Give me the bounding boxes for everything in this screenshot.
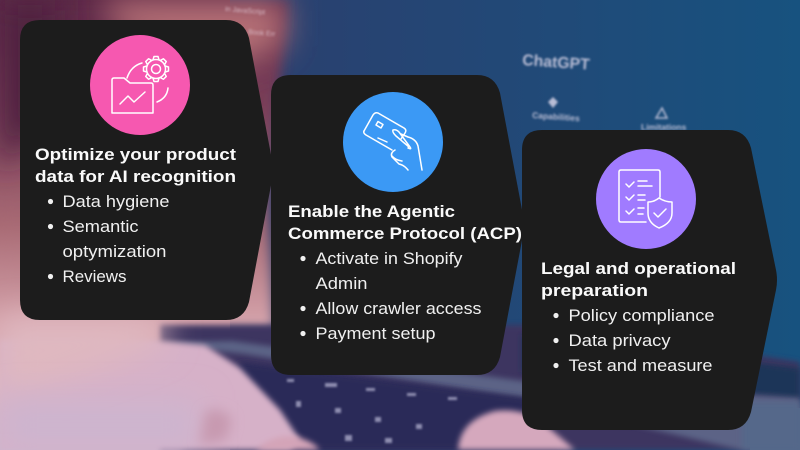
background: blurred ChatGPT screen text: Limitations bbox=[641, 122, 687, 132]
heading: step 1 bbox=[35, 145, 236, 186]
list: step 2 items: Activate in Shopify bbox=[316, 250, 463, 268]
list: step 1 items: Reviews bbox=[62, 268, 126, 286]
icon: checklist and shield bbox=[596, 149, 696, 249]
list: step 2 items: Allow crawler access bbox=[316, 300, 482, 318]
background: blurred ChatGPT screen text bbox=[225, 6, 687, 132]
icon: folder chart and gear bbox=[90, 35, 190, 135]
list: step 3 items: Policy compliance bbox=[568, 307, 714, 325]
background: blurred ChatGPT screen text: Book Err bbox=[248, 29, 276, 38]
heading: step 1: data for AI recognition bbox=[35, 167, 236, 186]
heading: step 3 bbox=[541, 259, 736, 300]
list: step 3 items bbox=[553, 307, 714, 375]
heading: step 1: Optimize your product bbox=[35, 145, 236, 164]
heading: step 2: Commerce Protocol (ACP) bbox=[288, 224, 522, 243]
heading: step 3: preparation bbox=[541, 281, 648, 300]
list: step 1 items: Semantic bbox=[62, 218, 138, 236]
list: step 2 items: Admin bbox=[316, 275, 368, 293]
panel: step 1 product data bbox=[20, 20, 273, 320]
panel: step 3 legal and operational bbox=[522, 130, 777, 430]
background: right hand bbox=[458, 410, 575, 450]
heading: step 2: Enable the Agentic bbox=[288, 202, 455, 221]
list: step 1 items: optymization bbox=[62, 243, 166, 261]
heading: step 2 bbox=[288, 202, 522, 243]
background: blurred ChatGPT screen text: ChatGPT bbox=[522, 52, 591, 74]
list: step 1 items: Data hygiene bbox=[62, 193, 170, 211]
background: blurred ChatGPT screen text: Capabilities bbox=[532, 110, 580, 123]
list: step 2 items bbox=[300, 250, 482, 343]
icon: hand holding credit card bbox=[343, 92, 443, 192]
panel: step 2 agentic commerce protocol bbox=[271, 75, 524, 375]
list: step 3 items: Test and measure bbox=[568, 357, 712, 375]
list: step 2 items: Payment setup bbox=[316, 325, 436, 343]
background: blurred ChatGPT screen text: in JavaScript bbox=[225, 6, 265, 16]
background: left hand bbox=[0, 340, 300, 450]
list: step 1 items bbox=[48, 193, 170, 286]
list: step 3 items: Data privacy bbox=[568, 332, 671, 350]
heading: step 3: Legal and operational bbox=[541, 259, 736, 278]
